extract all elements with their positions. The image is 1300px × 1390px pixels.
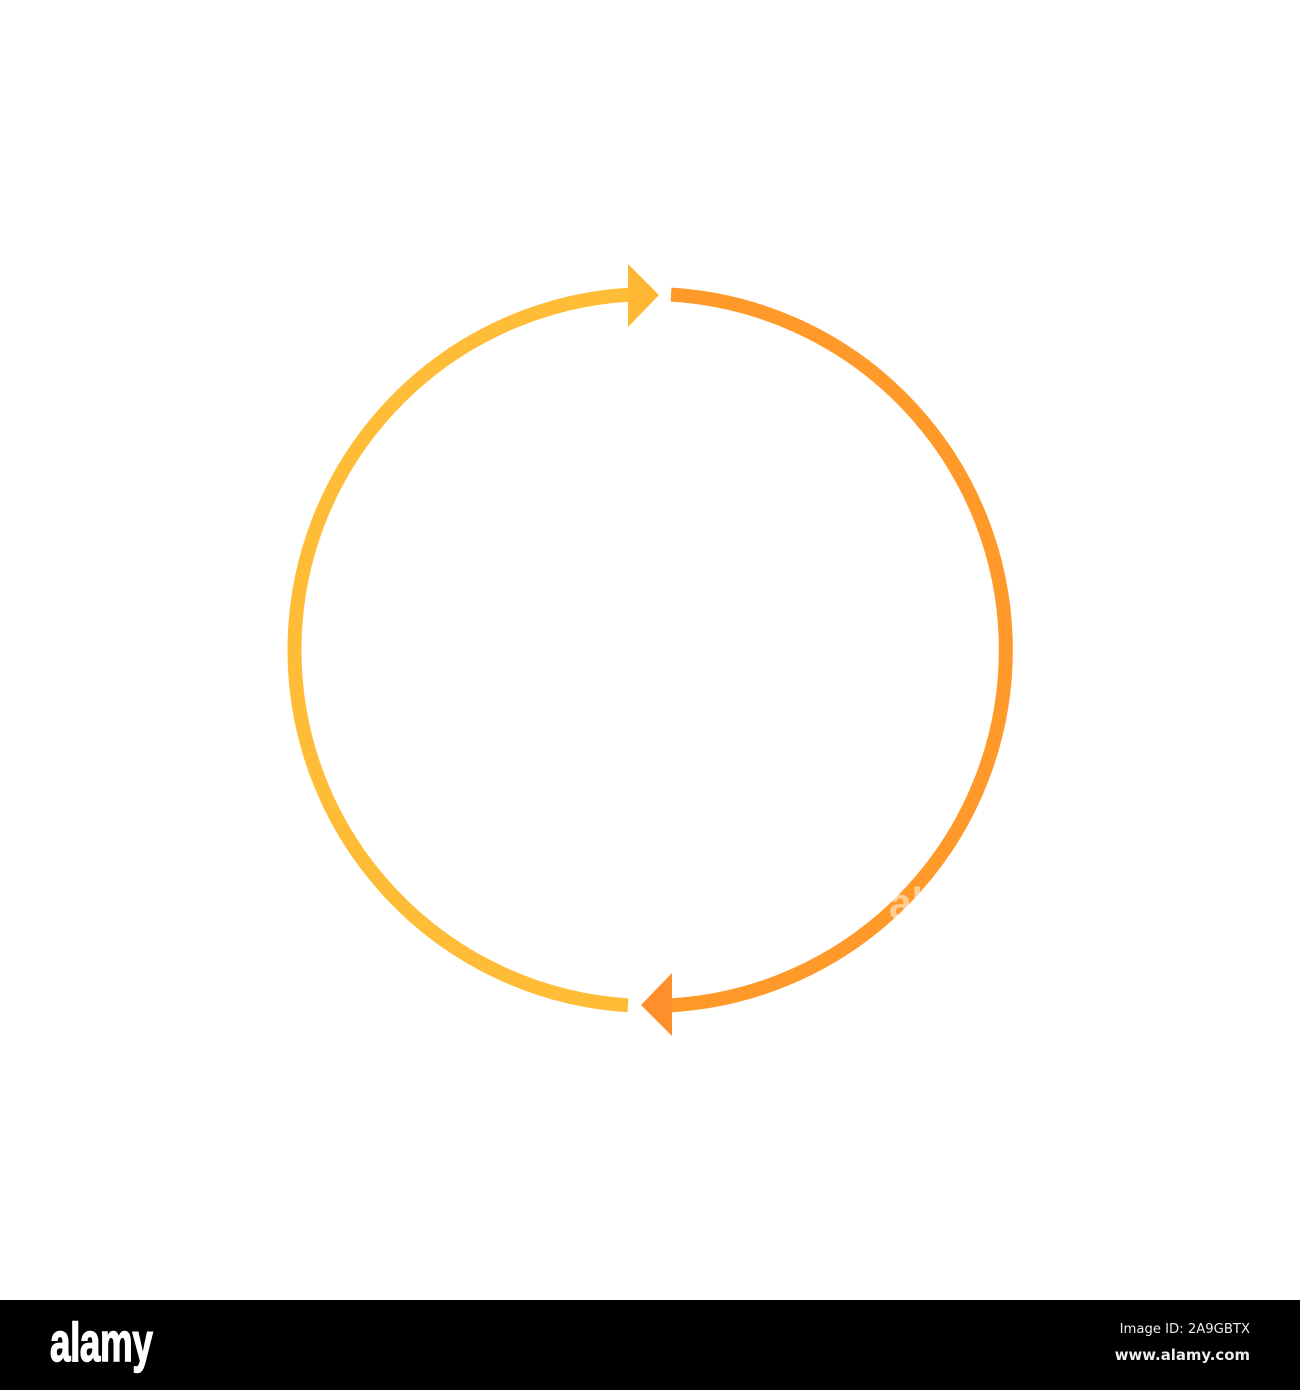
watermark fragment: al: [889, 879, 923, 928]
arrow: yellow left arc: [294, 264, 659, 1005]
image id: Image ID: 2A9GBTX: [1120, 1322, 1250, 1337]
arrow: orange right arc: [641, 295, 1006, 1036]
footer bar: [0, 1300, 1300, 1390]
logo: alamy: [50, 1311, 152, 1373]
website: www.alamy.com: [1115, 1346, 1250, 1364]
